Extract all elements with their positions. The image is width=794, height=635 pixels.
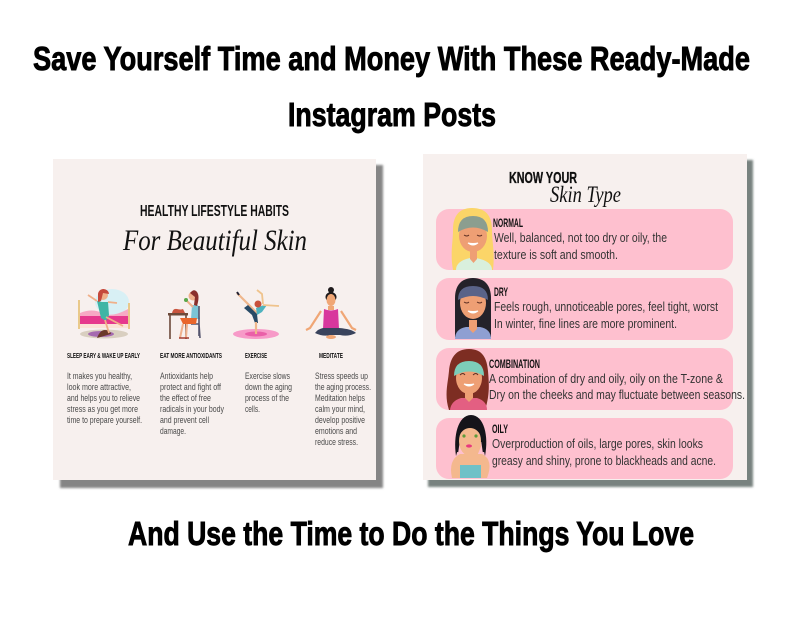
text block: sleep: look more attractive,	[67, 382, 131, 392]
text: normal: Well, balanced, not too dry or oily, the	[494, 230, 667, 245]
labels: habit headings: EAT MORE ANTIOXIDANTS	[160, 351, 222, 360]
icon: curly hair face	[447, 349, 489, 410]
icon: blonde face	[452, 208, 494, 270]
text block: sleep	[67, 371, 142, 425]
text: combination: COMBINATION	[489, 359, 540, 371]
text block: sleep: time to prepare yourself.	[67, 415, 142, 425]
text: normal: texture is soft and smooth.	[494, 247, 618, 262]
icon: dancer exercising	[233, 290, 279, 339]
text: oily	[492, 424, 716, 468]
icon: woman eating at table	[168, 290, 200, 339]
text block: antioxidants: radicals in your body	[160, 404, 224, 414]
icon: oily skin face	[451, 415, 490, 478]
card: combination	[436, 348, 745, 410]
text block: exercise	[245, 371, 292, 414]
text block: antioxidants	[160, 371, 224, 436]
title: Instagram Posts	[288, 96, 496, 133]
text block: meditate: Stress speeds up	[315, 371, 368, 381]
heading: know your skin type	[509, 170, 621, 207]
text block: sleep: and helps you to relieve	[67, 393, 140, 403]
text block: antioxidants: protect and fight off	[160, 382, 221, 392]
panel: know your skin type	[423, 154, 753, 487]
text block: antioxidants: Antioxidants help	[160, 371, 213, 381]
labels: habit headings: MEDITATE	[319, 351, 343, 360]
text: dry: DRY	[494, 287, 508, 299]
text: dry: In winter, fine lines are more prominent.	[494, 316, 677, 331]
text: dry: Feels rough, unnoticeable pores, feel tight, worst	[494, 299, 718, 314]
heading: healthy lifestyle habits: HEALTHY LIFESTYLE HABITS	[140, 203, 289, 220]
icon: dark hair face	[455, 278, 491, 339]
text block: exercise: cells.	[245, 404, 260, 414]
text block: antioxidants: the effect of free	[160, 393, 211, 403]
text: normal: NORMAL	[493, 218, 523, 230]
text block: exercise: down the aging	[245, 382, 292, 392]
text: oily: OILY	[492, 424, 508, 436]
text: combination: Dry on the cheeks and may fluctuate between seasons.	[489, 387, 745, 402]
heading: healthy lifestyle habits	[122, 203, 307, 257]
text block: sleep: It makes you healthy,	[67, 371, 132, 381]
icon: woman waking up on bed	[78, 289, 130, 338]
text block: exercise: process of the	[245, 393, 289, 403]
text block: meditate: Meditation helps	[315, 393, 365, 403]
card: oily	[436, 415, 733, 479]
labels: habit headings: EXERCISE	[245, 351, 267, 360]
text: oily: greasy and shiny, prone to blackheads and acne.	[492, 453, 716, 468]
labels: habit headings	[67, 351, 343, 360]
heading: healthy lifestyle habits: For Beautiful Skin	[122, 224, 307, 257]
heading: know your skin type: Skin Type	[550, 182, 621, 207]
labels: habit headings: SLEEP EARY & WAKE UP EARLY	[67, 351, 140, 360]
text block: meditate: reduce stress.	[315, 437, 358, 447]
card: dry	[436, 278, 733, 340]
heading: know your skin type: KNOW YOUR	[509, 170, 577, 187]
text block: meditate: emotions and	[315, 426, 357, 436]
text block: exercise: Exercise slows	[245, 371, 290, 381]
text block: meditate: the aging process.	[315, 382, 371, 392]
text block: antioxidants: and prevent cell	[160, 415, 209, 425]
panel: healthy lifestyle habits	[53, 159, 383, 488]
text: oily: Overproduction of oils, large pores, skin looks	[492, 436, 703, 451]
icon: woman meditating	[306, 287, 356, 339]
text block: meditate: develop positive	[315, 415, 365, 425]
title	[33, 40, 750, 133]
text: dry	[494, 287, 718, 331]
text block: antioxidants: damage.	[160, 426, 186, 436]
text block: meditate	[315, 371, 371, 447]
text block: meditate: calm your mind,	[315, 404, 365, 414]
text: combination	[489, 359, 745, 402]
text block: sleep: stress as you get more	[67, 404, 138, 414]
card: normal	[436, 208, 733, 270]
text: combination: A combination of dry and oily, oily on the T-zone &	[489, 371, 723, 386]
text: normal	[493, 218, 667, 262]
